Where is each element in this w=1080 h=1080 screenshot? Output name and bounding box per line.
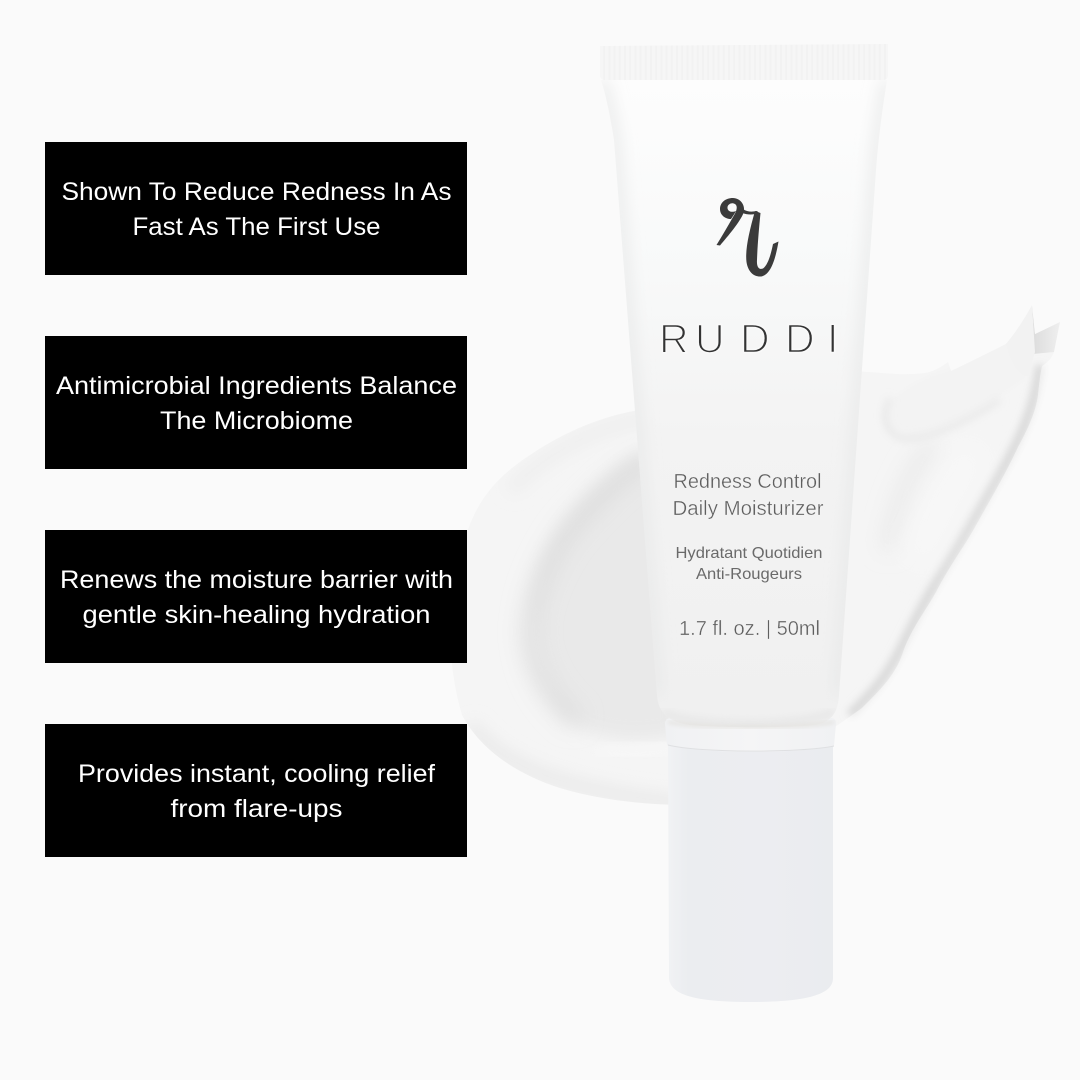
tip fold xyxy=(1032,312,1056,354)
swoosh lobe edge shadow xyxy=(885,398,1000,439)
crescent shadow in left swirl xyxy=(530,458,648,722)
French product name xyxy=(676,545,822,583)
panel: benefit 2 xyxy=(45,336,467,469)
panel: benefit 1: Shown To Reduce Redness In As xyxy=(62,178,452,206)
collar shadow xyxy=(668,722,834,727)
collar seam xyxy=(668,745,834,751)
right edge shadow xyxy=(850,365,1040,715)
product name: Daily Moisturizer xyxy=(672,497,824,520)
volume: 1.7 fl. oz. | 50ml xyxy=(679,618,820,640)
tube screw cap xyxy=(668,745,833,1002)
panel: benefit 4: from flare-ups xyxy=(170,795,342,823)
panel: benefit 3 xyxy=(45,530,467,663)
lower highlight of left swirl xyxy=(600,745,680,753)
cream swatch behind tube xyxy=(450,305,1060,805)
central right ridge xyxy=(915,450,975,560)
product name: Redness Control xyxy=(674,470,822,493)
product tube xyxy=(606,100,880,1002)
tip highlight xyxy=(1032,310,1035,354)
lower edge band of left swirl xyxy=(470,725,680,803)
panel: benefit 2: The Microbiome xyxy=(160,407,353,435)
brand monogram icon xyxy=(716,198,778,277)
French product name: Hydratant Quotidien xyxy=(676,545,822,562)
panel: benefit 2: Antimicrobial Ingredients Balance xyxy=(56,372,457,400)
tube collar xyxy=(665,718,836,752)
product name xyxy=(672,470,824,520)
panel: benefit 3: gentle skin-healing hydration xyxy=(82,601,430,629)
panel: benefit 4: Provides instant, cooling relief xyxy=(78,760,435,788)
panel: benefit 3: Renews the moisture barrier with xyxy=(60,566,453,594)
panel: benefit 4 xyxy=(45,724,467,857)
central right trough shadow xyxy=(888,445,935,550)
brand name: RUDDI xyxy=(659,316,838,362)
panel: benefit 1 xyxy=(45,142,467,275)
swoosh lobe xyxy=(883,338,1027,438)
panel: benefit 1: Fast As The First Use xyxy=(132,213,380,241)
French product name: Anti-Rougeurs xyxy=(696,566,802,583)
tube body xyxy=(601,80,887,727)
inner pool of left swirl xyxy=(544,476,669,736)
top rim of left swirl xyxy=(510,418,650,490)
tube crimp seal xyxy=(600,44,888,80)
